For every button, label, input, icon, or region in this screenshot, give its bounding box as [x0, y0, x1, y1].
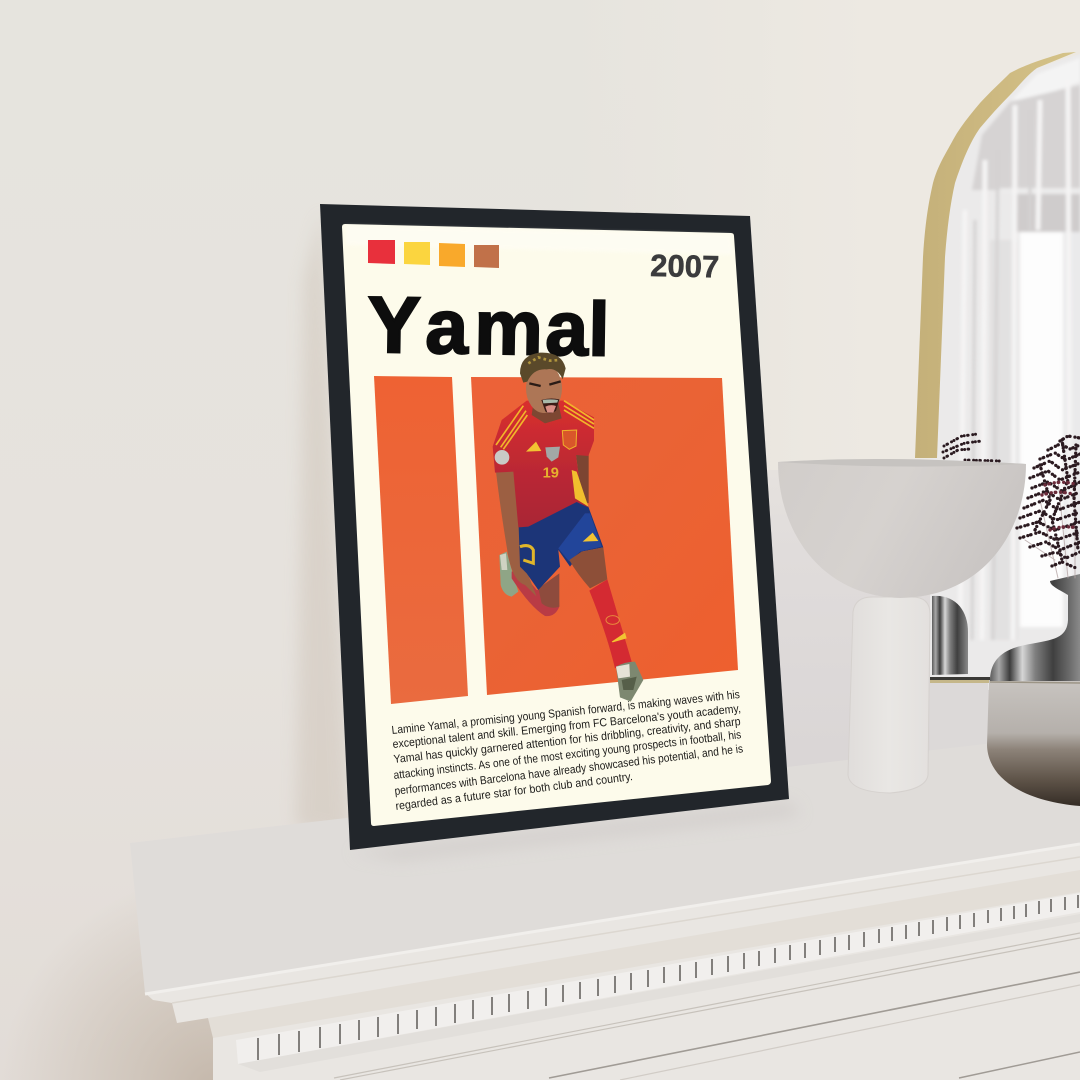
biography text: Yamal has quickly garnered attention for his dribbling, creativity, and sharp [393, 715, 741, 766]
jersey number: 19 [543, 465, 559, 481]
left arm [496, 470, 537, 597]
biography text: regarded as a future star for both club and country. [395, 770, 633, 813]
marble stem [848, 597, 930, 793]
glass body [987, 680, 1080, 806]
shadow of the frame on the wall [296, 210, 350, 840]
colour swatches [368, 240, 499, 268]
dentil slits [258, 895, 1078, 1060]
mirror base ledge [930, 677, 990, 752]
footed bowl [778, 459, 1026, 793]
bowl [778, 459, 1026, 598]
mirror glass with curtain reflection [930, 54, 1080, 690]
shoulder stripes [496, 401, 594, 449]
jersey side stripe [572, 470, 588, 507]
chrome upper [990, 574, 1080, 681]
gold mirror frame [915, 52, 1076, 458]
right arm [576, 455, 589, 503]
title: l [588, 287, 610, 373]
neck [532, 403, 562, 423]
head [526, 364, 562, 413]
right boot [616, 662, 643, 702]
shelf shadow under frame [350, 802, 800, 860]
shorts [519, 501, 603, 590]
title: Y [367, 280, 421, 370]
mirror reflection of vase [932, 596, 968, 675]
hair [520, 353, 566, 383]
year label: 2007 [650, 248, 720, 285]
right orange panel [471, 377, 738, 695]
mantel front moulding [145, 843, 1080, 1080]
biography text: Lamine Yamal, a promising young Spanish forward, is making waves with his [391, 688, 741, 737]
arched mirror [915, 52, 1080, 690]
biography text: exceptional talent and skill. Emerging from FC Barcelona's youth academy, [392, 702, 741, 751]
smoked glass vase [987, 574, 1080, 806]
right thigh [569, 547, 607, 588]
biography text: performances with Barcelona have already showcased his potential, and he is [394, 742, 744, 798]
biography text: attacking instincts. As one of the most exciting young prospects in football, his [393, 728, 742, 782]
rear leg [512, 570, 559, 616]
jersey [493, 401, 594, 527]
sock [589, 579, 632, 668]
eyes [529, 381, 561, 386]
dried flowers in vase [1017, 436, 1080, 578]
left orange panel [374, 376, 468, 704]
title: ama [425, 284, 590, 372]
biography text [391, 688, 744, 813]
poster frame [320, 204, 789, 850]
small dried flowers behind bowl [943, 434, 1000, 461]
poster sheet [342, 224, 771, 826]
player cutout [493, 353, 643, 702]
left boot [499, 552, 518, 597]
mouth [541, 398, 559, 413]
badge patches [495, 450, 509, 465]
mantel top surface [130, 733, 1080, 993]
short number and stripes [520, 546, 533, 563]
